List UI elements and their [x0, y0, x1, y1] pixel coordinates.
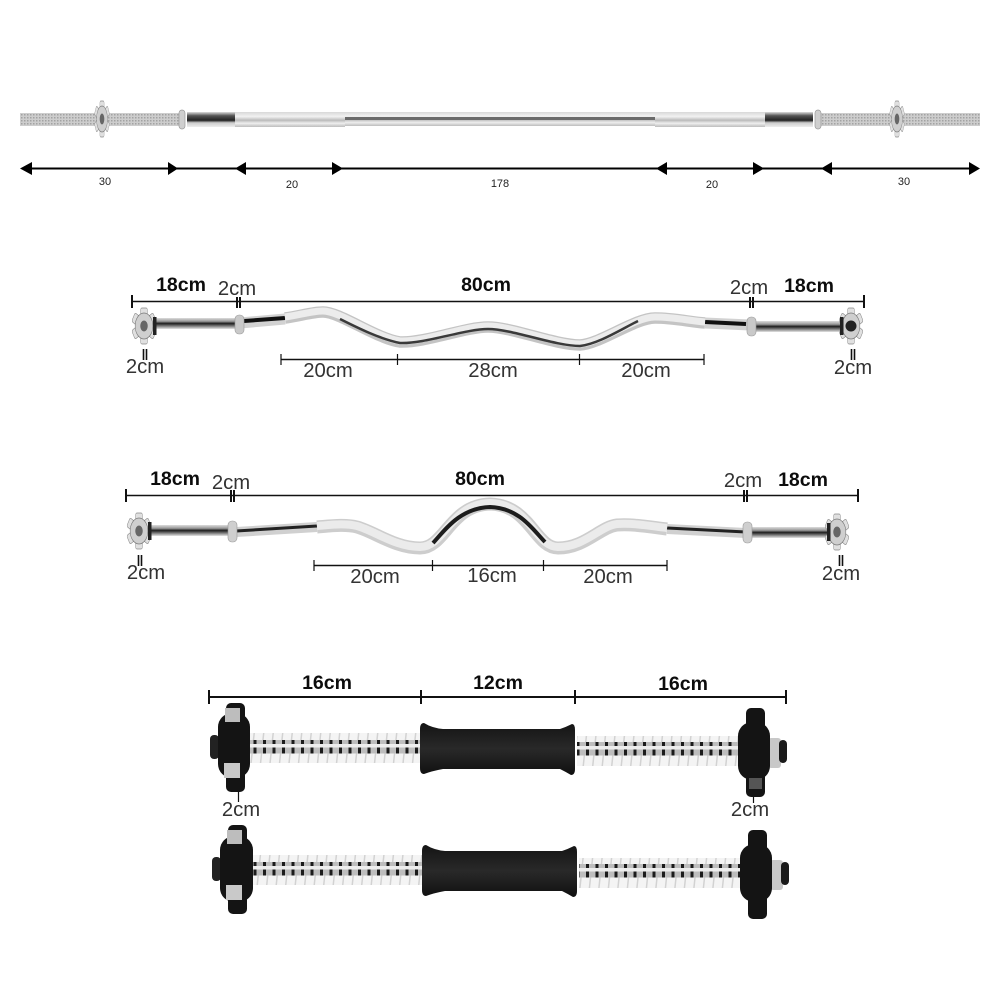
label: 30: 30	[898, 176, 910, 188]
label: 80cm: 80cm	[455, 468, 505, 490]
rubber grip	[422, 845, 577, 897]
label: 20cm: 20cm	[621, 360, 671, 382]
label: 20cm: 20cm	[303, 360, 353, 382]
label: 2cm: 2cm	[127, 562, 165, 584]
label: 18cm: 18cm	[156, 274, 206, 296]
label: 2cm: 2cm	[222, 799, 260, 821]
dumbbell handle 2	[212, 825, 789, 919]
right star collar	[889, 101, 905, 137]
label: 80cm: 80cm	[461, 274, 511, 296]
dimension arrows: straight barbell	[20, 162, 980, 191]
label: 2cm: 2cm	[126, 356, 164, 378]
dimensions: EZ curl bar	[126, 274, 872, 382]
label: 16cm: 16cm	[467, 565, 517, 587]
dimensions: W curl bar	[126, 468, 860, 588]
label: 2cm: 2cm	[822, 563, 860, 585]
dumbbell handle 1	[210, 703, 787, 797]
label: 20: 20	[286, 179, 298, 191]
label: 2cm: 2cm	[212, 472, 250, 494]
right star collar	[839, 308, 863, 344]
dimensions: dumbbell	[209, 672, 786, 821]
right star collar	[825, 514, 849, 550]
left spin-lock collar	[210, 703, 250, 792]
label: 20cm: 20cm	[350, 566, 400, 588]
EZ curl bar	[132, 308, 863, 346]
label: 18cm: 18cm	[784, 275, 834, 297]
label: 18cm: 18cm	[150, 468, 200, 490]
left star collar	[94, 101, 110, 137]
label: 30: 30	[99, 176, 111, 188]
label: 16cm: 16cm	[658, 673, 708, 695]
left star collar	[127, 513, 152, 549]
label: 2cm: 2cm	[731, 799, 769, 821]
right spin-lock collar	[738, 708, 787, 797]
W curl bar	[127, 503, 849, 550]
label: 2cm: 2cm	[218, 278, 256, 300]
label: 20cm: 20cm	[583, 566, 633, 588]
left star collar	[132, 308, 156, 344]
label: 12cm: 12cm	[473, 672, 523, 694]
label: 2cm: 2cm	[834, 357, 872, 379]
rubber grip	[420, 723, 575, 775]
label: 178: 178	[491, 178, 509, 190]
label: 18cm: 18cm	[778, 469, 828, 491]
straight barbell	[20, 101, 980, 137]
label: 28cm: 28cm	[468, 360, 518, 382]
label: 2cm: 2cm	[730, 277, 768, 299]
label: 16cm: 16cm	[302, 672, 352, 694]
right spin-lock collar	[740, 830, 789, 919]
label: 20: 20	[706, 179, 718, 191]
left spin-lock collar	[212, 825, 253, 914]
label: 2cm: 2cm	[724, 470, 762, 492]
